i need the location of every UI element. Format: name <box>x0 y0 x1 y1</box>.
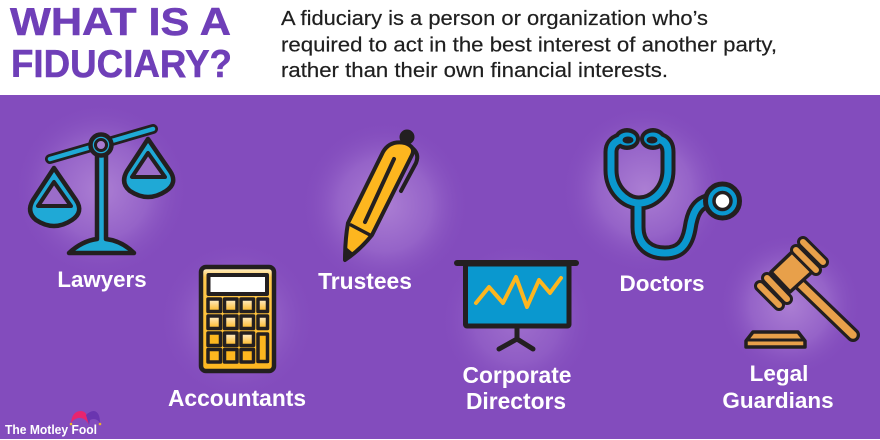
label: Corporate Directors <box>463 362 571 414</box>
definition text: rather than their own financial interests. <box>281 59 668 82</box>
label: Legal Guardians <box>722 361 834 413</box>
header background <box>0 0 880 95</box>
label: Lawyers: Lawyers <box>57 267 147 292</box>
icon: scales <box>30 129 173 253</box>
title <box>10 1 232 86</box>
title: FIDUCIARY? <box>11 43 232 86</box>
icon: stethoscope <box>611 128 740 253</box>
icon: pen <box>345 130 417 260</box>
logo: The Motley Fool <box>5 411 101 437</box>
label: Doctors: Doctors <box>619 271 705 296</box>
label: Legal Guardians: Guardians <box>722 388 834 413</box>
label: Corporate Directors: Directors <box>466 388 566 414</box>
definition text <box>281 7 777 82</box>
icon: presentation board <box>457 263 576 349</box>
logo: The Motley Fool: The Motley Fool <box>5 423 97 437</box>
definition text: A fiduciary is a person or organization who’s <box>281 7 708 30</box>
label: Corporate Directors: Corporate <box>463 362 571 388</box>
label: Accountants: Accountants <box>168 385 306 411</box>
label: Legal Guardians: Legal <box>750 361 808 386</box>
icon: gavel <box>746 242 853 347</box>
label: Trustees: Trustees <box>318 268 412 294</box>
title: WHAT IS A <box>10 1 231 44</box>
purple panel <box>0 95 880 439</box>
icon: calculator <box>201 267 274 371</box>
definition text: required to act in the best interest of another party, <box>281 34 777 56</box>
